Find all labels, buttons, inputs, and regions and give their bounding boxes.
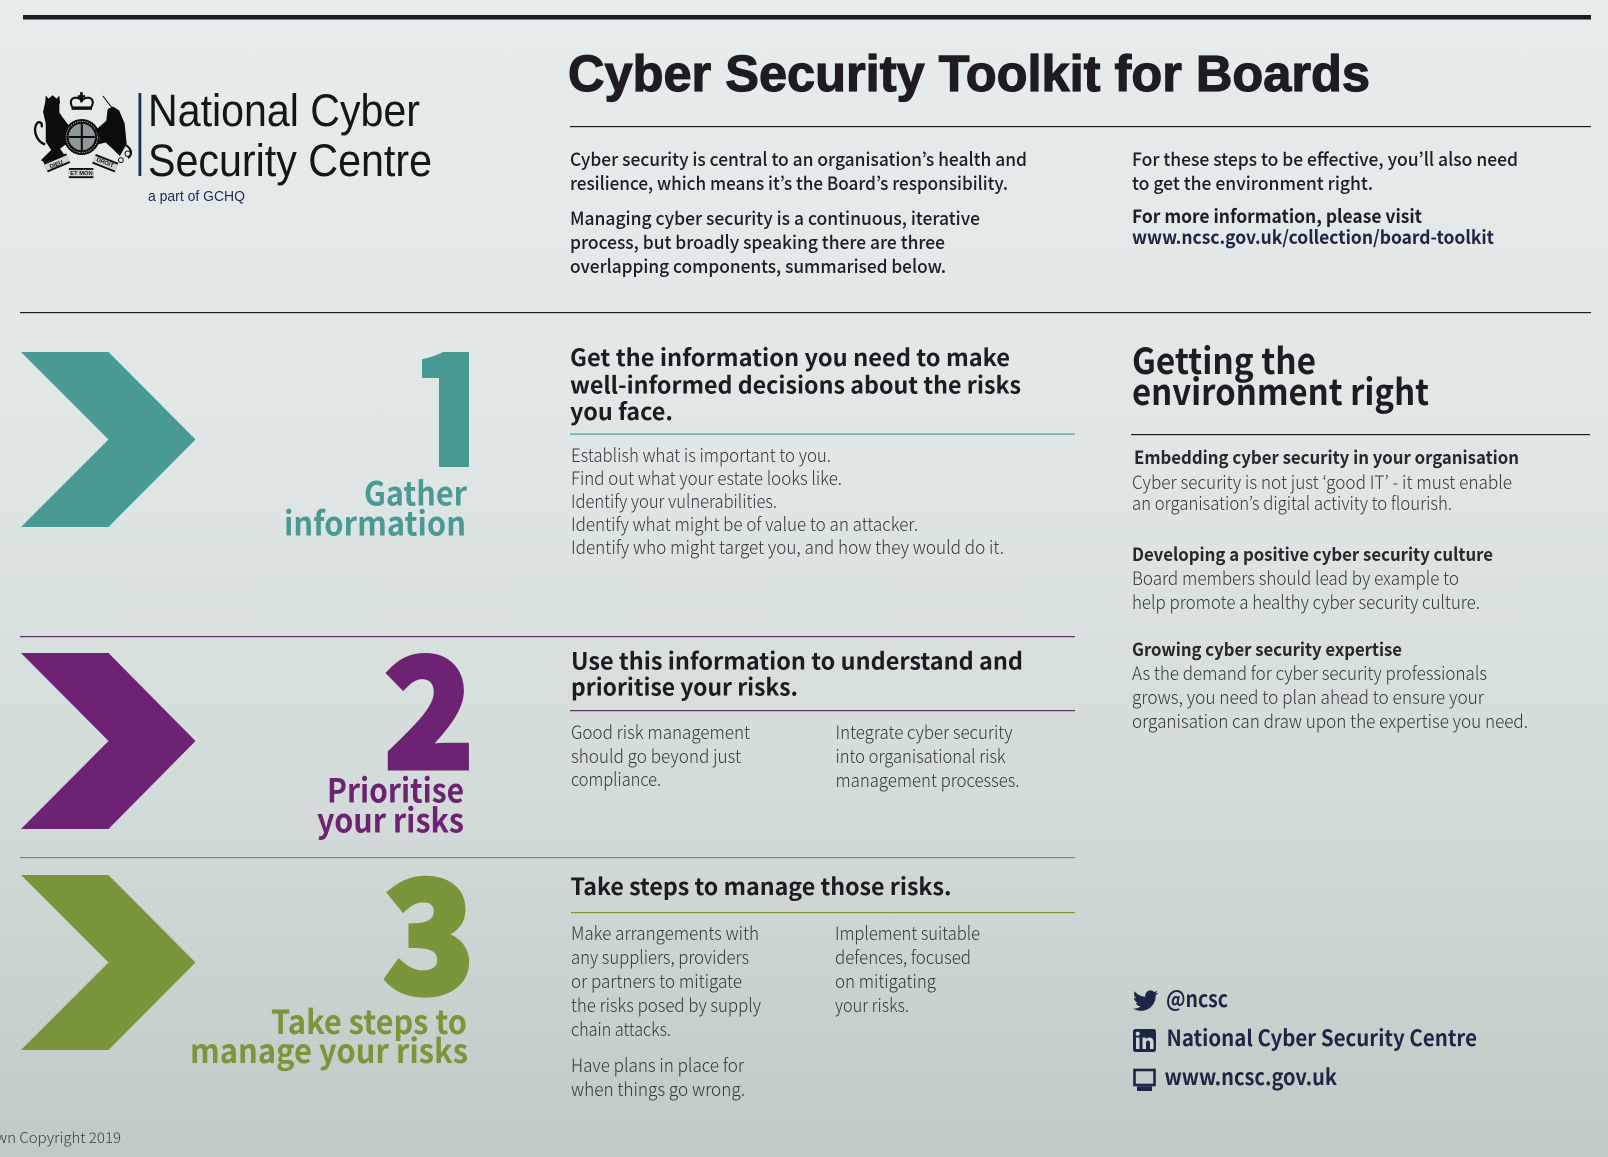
linkedin name: National Cyber Security Centre — [1166, 1021, 1477, 1053]
body: step 3 right column: on mitigating — [835, 968, 936, 994]
logo: National Cyber Security Centre: National Cyber — [148, 85, 420, 136]
text block: embedding cyber security: Cyber security is not just ‘good IT’ - it must enable — [1132, 469, 1512, 495]
body: step 3 left column — [571, 920, 761, 1102]
body: step 3 left column: the risks posed by supply — [571, 992, 761, 1018]
title: Cyber Security Toolkit for Boards — [568, 45, 1370, 102]
intro text: left column: resilience, which means it’s the Board’s responsibility. — [570, 170, 1008, 196]
panel: getting the environment right — [1131, 333, 1590, 734]
body: step 3 right column — [835, 920, 980, 1018]
heading: step 1: you face. — [570, 393, 673, 427]
icon: royal coat of arms crest: DROIT — [95, 157, 115, 170]
number 3: 3 — [383, 813, 475, 1038]
logo: National Cyber Security Centre: a part of GCHQ — [148, 188, 245, 205]
twitter handle: @ncsc — [1166, 982, 1228, 1014]
label: prioritise your risks — [317, 764, 464, 842]
label: take steps to manage your risks — [190, 996, 468, 1073]
body: step 2 left column — [571, 719, 750, 792]
text block: growing expertise: grows, you need to plan ahead to ensure your — [1132, 684, 1484, 710]
intro text: right column: www.ncsc.gov.uk/collection/board-toolkit — [1132, 224, 1494, 250]
icon: royal coat of arms crest: DIEU — [49, 160, 64, 171]
text block: embedding cyber security: an organisation’s digital activity to flourish. — [1132, 490, 1452, 516]
body: step 1 actions: Identify what might be of value to an attacker. — [571, 511, 918, 537]
panel: step 1 gather information — [21, 347, 1075, 558]
intro text: left column: process, but broadly speaking there are three — [570, 229, 945, 255]
intro text: right column — [1132, 146, 1518, 250]
body: step 3 left column: Have plans in place for — [571, 1052, 744, 1078]
body: step 3 right column: defences, focused — [835, 944, 971, 970]
text block: growing expertise: As the demand for cyber security professionals — [1132, 660, 1487, 686]
icon: teal chevron arrow — [21, 352, 196, 527]
intro text: right column: For more information, please visit — [1132, 203, 1422, 229]
body: step 3 left column: chain attacks. — [571, 1016, 671, 1042]
icon: purple chevron arrow — [21, 653, 196, 829]
intro text: left column: Managing cyber security is a continuous, iterative — [570, 205, 980, 231]
body: step 2 right column: Integrate cyber security — [836, 719, 1012, 745]
panel: step 2 prioritise your risks — [21, 592, 1075, 842]
text block: growing expertise: organisation can draw upon the expertise you need. — [1132, 708, 1528, 734]
icon: twitter bird — [1133, 990, 1158, 1011]
body: step 1 actions: Establish what is important to you. — [571, 442, 831, 468]
text block: embedding cyber security: Embedding cyber security in your organisation — [1134, 444, 1519, 470]
text block: positive culture: help promote a healthy cyber security culture. — [1132, 589, 1480, 615]
body: step 3 left column: any suppliers, providers — [571, 944, 749, 970]
body: step 3 left column: Make arrangements with — [571, 920, 759, 946]
body: step 2 right column: management processes. — [836, 767, 1020, 793]
text block: positive culture: Developing a positive cyber security culture — [1132, 541, 1493, 567]
heading: step 1 — [570, 339, 1021, 427]
heading: step 2 — [571, 642, 1023, 702]
body: step 2 right column — [836, 719, 1020, 793]
logo: National Cyber Security Centre: Security Centre — [148, 135, 432, 186]
logo: National Cyber Security Centre — [35, 85, 432, 205]
number 1: 1 — [409, 287, 499, 512]
body: step 3 right column: Implement suitable — [835, 920, 980, 946]
body: step 3 right column: your risks. — [835, 992, 909, 1018]
label: take steps to manage your risks: Take steps to — [271, 996, 467, 1044]
heading: step 3: Take steps to manage those risks. — [570, 868, 952, 902]
text block: growing expertise: Growing cyber security expertise — [1132, 636, 1402, 662]
text block: growing expertise — [1132, 636, 1528, 734]
text block: positive culture — [1132, 541, 1493, 615]
heading: step 2: Use this information to understand and — [571, 642, 1023, 676]
intro text: right column: to get the environment right. — [1132, 170, 1373, 196]
body: step 1 actions — [571, 442, 1004, 560]
body: step 1 actions: Identify your vulnerabilities. — [571, 488, 777, 514]
icon: royal coat of arms crest: ET MON — [70, 171, 93, 177]
body: step 3 left column: when things go wrong. — [571, 1076, 745, 1102]
body: step 2 left column: compliance. — [571, 766, 661, 792]
body: step 1 actions: Identify who might target you, and how they would do it. — [571, 534, 1004, 560]
panel: social links — [1133, 982, 1477, 1092]
text block: positive culture: Board members should lead by example to — [1132, 565, 1459, 591]
label: prioritise your risks: Prioritise — [327, 764, 464, 812]
body: step 3 left column: or partners to mitigate — [571, 968, 742, 994]
heading: step 1: Get the information you need to make — [570, 339, 1010, 373]
icon: royal coat of arms crest — [35, 92, 131, 177]
intro text: left column: Cyber security is central to an organisation’s health and — [570, 146, 1027, 172]
website: www.ncsc.gov.uk — [1164, 1060, 1338, 1092]
label: prioritise your risks: your risks — [317, 794, 464, 842]
label: gather information — [284, 468, 468, 546]
body: step 2 right column: into organisational risk — [836, 743, 1006, 769]
heading: getting the environment right — [1132, 333, 1429, 416]
heading: step 1: well-informed decisions about the risks — [570, 366, 1021, 400]
intro text: left column — [570, 146, 1027, 279]
body: step 2 left column: should go beyond just — [571, 743, 741, 769]
intro text: right column: For these steps to be effective, you’ll also need — [1132, 146, 1518, 172]
heading: getting the environment right: Getting the — [1132, 333, 1316, 385]
icon: green chevron arrow — [21, 875, 196, 1050]
icon: linkedin — [1133, 1029, 1156, 1052]
icon: computer monitor — [1134, 1070, 1154, 1091]
number 2: 2 — [384, 592, 474, 812]
body: step 2 left column: Good risk management — [571, 719, 750, 745]
panel: step 3 take steps to manage your risks — [21, 813, 1075, 1102]
label: gather information: Gather — [364, 468, 468, 516]
label: gather information: information — [284, 498, 466, 546]
label: take steps to manage your risks: manage your risks — [190, 1025, 468, 1073]
heading: getting the environment right: environment right — [1132, 364, 1429, 416]
intro text: left column: overlapping components, summarised below. — [570, 253, 946, 279]
heading: step 2: prioritise your risks. — [571, 668, 798, 702]
text block: embedding cyber security — [1132, 444, 1519, 516]
body: step 1 actions: Find out what your estate looks like. — [571, 465, 842, 491]
